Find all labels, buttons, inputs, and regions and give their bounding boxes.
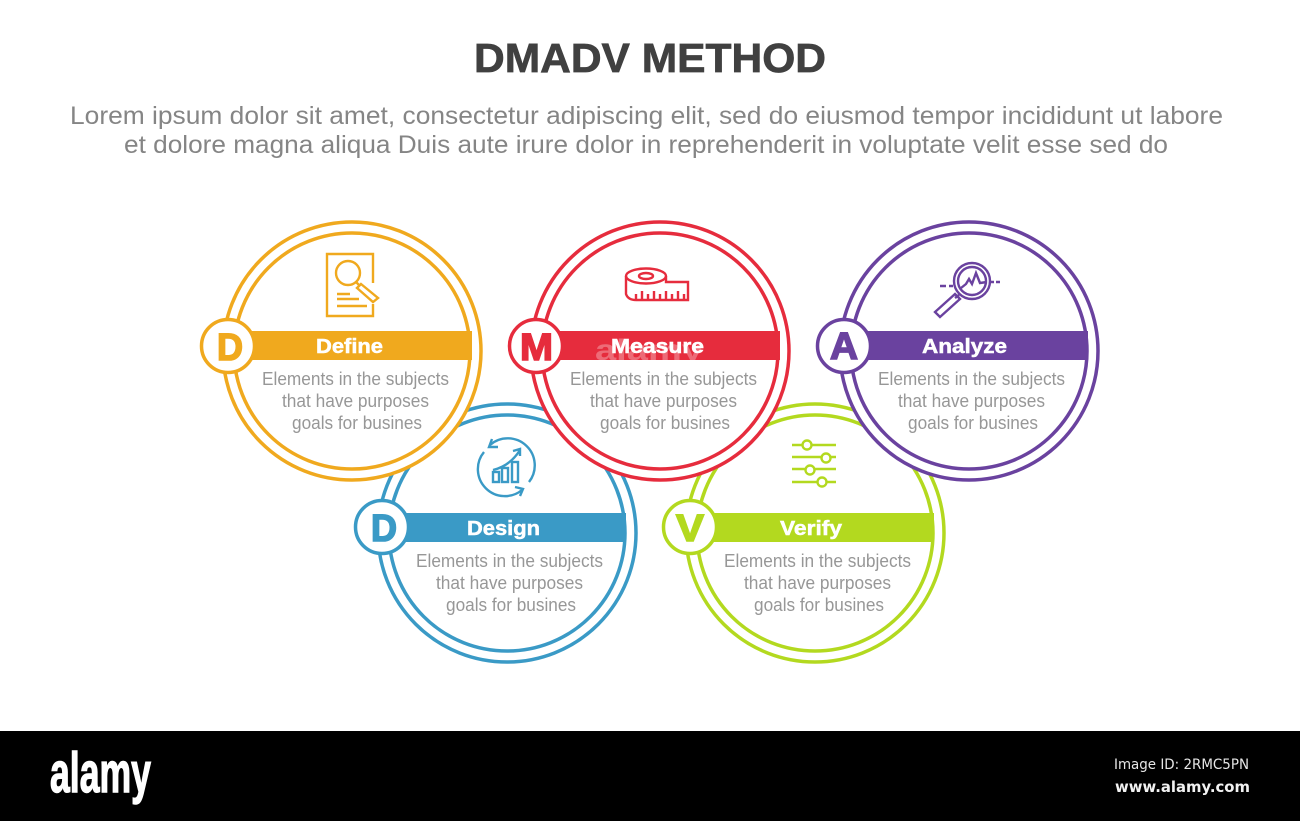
text: design: Elements in the subjects <box>416 551 603 571</box>
text: analyze <box>878 369 1065 433</box>
badge: design letter: D <box>371 508 397 550</box>
panel: measure <box>510 222 789 480</box>
text: define: that have purposes <box>282 391 429 411</box>
badge: verify letter <box>664 500 716 554</box>
text: define <box>262 369 449 433</box>
band: design <box>390 513 626 542</box>
text: verify: that have purposes <box>744 573 891 593</box>
icon: cycle with growth chart <box>478 438 535 496</box>
heading: design: Design <box>467 518 540 540</box>
text: measure: Elements in the subjects <box>570 369 757 389</box>
text: verify <box>724 551 911 615</box>
band: verify <box>698 513 934 542</box>
badge: measure letter <box>510 320 562 372</box>
icon: measuring tape <box>626 268 688 300</box>
panel: analyze <box>818 222 1098 480</box>
band: analyze <box>852 331 1088 360</box>
band: define <box>236 331 472 360</box>
text: design <box>416 551 603 615</box>
website: www.alamy.com <box>1115 778 1250 796</box>
badge: define letter <box>202 320 254 372</box>
text: verify: goals for busines <box>754 595 884 615</box>
heading: define: Define <box>316 336 383 358</box>
text: measure: that have purposes <box>590 391 737 411</box>
title: DMADV METHOD <box>474 35 826 81</box>
band: measure <box>544 331 780 360</box>
intro text: et dolore magna aliqua Duis aute irure dolor in reprehenderit in voluptate velit esse sed do <box>124 131 1168 159</box>
text: analyze: that have purposes <box>898 391 1045 411</box>
text: analyze: goals for busines <box>908 413 1038 433</box>
badge: verify letter: V <box>676 508 705 550</box>
intro text: Lorem ipsum dolor sit amet, consectetur adipiscing elit, sed do eiusmod tempor incididunt ut labore <box>70 102 1223 130</box>
text: measure <box>570 369 757 433</box>
badge: measure letter: M <box>520 327 553 369</box>
footer bar <box>0 731 1300 821</box>
logo: alamy: alamy <box>50 741 151 805</box>
heading: verify: Verify <box>780 518 843 540</box>
heading: analyze: Analyze <box>922 336 1007 358</box>
heading: measure: Measure <box>611 336 704 358</box>
text: design: that have purposes <box>436 573 583 593</box>
text: define: goals for busines <box>292 413 422 433</box>
panel: define <box>202 222 481 480</box>
badge: analyze letter <box>818 320 870 372</box>
panel: design <box>356 404 636 662</box>
image id: Image ID: 2RMC5PN <box>1114 757 1249 773</box>
icon: sliders <box>792 440 836 486</box>
text: measure: goals for busines <box>600 413 730 433</box>
badge: design letter <box>356 500 408 554</box>
watermark on measure band: alamy <box>595 334 703 367</box>
intro text <box>70 102 1223 159</box>
text: verify: Elements in the subjects <box>724 551 911 571</box>
icon: document with magnifier <box>327 254 378 316</box>
badge: analyze letter: A <box>830 326 858 368</box>
text: analyze: Elements in the subjects <box>878 369 1065 389</box>
panel: verify <box>664 404 944 662</box>
text: design: goals for busines <box>446 595 576 615</box>
text: define: Elements in the subjects <box>262 369 449 389</box>
icon: magnifier with pulse <box>935 263 1000 317</box>
badge: define letter: D <box>217 327 243 369</box>
